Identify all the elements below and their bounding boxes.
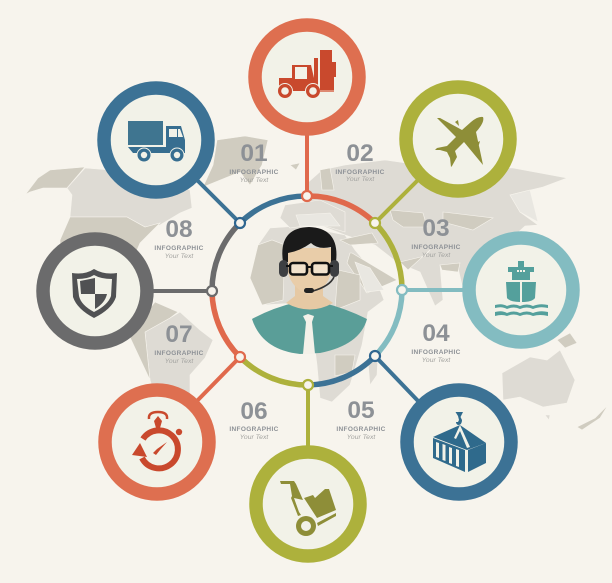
label 07 — [154, 321, 204, 365]
step circle 6: stopwatch — [105, 390, 209, 494]
world map — [2, 136, 608, 430]
central ring — [212, 196, 402, 385]
label 02: INFOGRAPHIC — [335, 169, 385, 176]
step circle 4: container — [407, 390, 511, 494]
label 03: Your Text — [422, 252, 451, 259]
label 02: 02 — [346, 140, 374, 167]
icon: ship — [495, 261, 548, 316]
step circle 7: shield — [43, 239, 147, 343]
label 06 — [229, 398, 279, 441]
label 01: 01 — [240, 140, 268, 167]
icon: shield — [72, 269, 117, 318]
step circle 2: airplane — [406, 87, 510, 191]
label 07: Your Text — [165, 358, 194, 365]
label 04 — [411, 320, 461, 364]
icon: truck — [128, 121, 185, 162]
label 07: INFOGRAPHIC — [154, 350, 204, 357]
connector lines — [150, 130, 465, 450]
label 07: 07 — [165, 321, 193, 348]
label 06: Your Text — [240, 434, 269, 441]
label 08: INFOGRAPHIC — [154, 245, 204, 252]
label 05 — [336, 397, 386, 441]
label 03: 03 — [422, 215, 450, 242]
icon: airplane — [435, 117, 483, 167]
label 03: INFOGRAPHIC — [411, 244, 461, 251]
label 05: 05 — [347, 397, 375, 424]
label 06: 06 — [240, 398, 268, 425]
label 08: Your Text — [165, 253, 194, 260]
label 01: Your Text — [240, 177, 269, 184]
label 04: Your Text — [422, 357, 451, 364]
step circle 1: forklift — [255, 25, 359, 129]
ring nodes — [207, 191, 407, 390]
label 08: 08 — [165, 216, 193, 243]
label 02 — [335, 140, 385, 183]
label 03 — [411, 215, 461, 259]
label 08 — [154, 216, 204, 260]
step circle 3: ship — [469, 238, 573, 342]
agent with headset — [252, 227, 367, 354]
icon: hand truck — [280, 481, 336, 536]
label 01 — [229, 140, 279, 184]
icon: stopwatch — [132, 412, 182, 468]
label 06: INFOGRAPHIC — [229, 426, 279, 433]
label 02: Your Text — [346, 176, 375, 183]
label 05: Your Text — [347, 434, 376, 441]
label 04: INFOGRAPHIC — [411, 349, 461, 356]
label 04: 04 — [422, 320, 450, 347]
step circle 5: hand truck — [256, 452, 360, 556]
icon: forklift — [278, 50, 336, 98]
label 01: INFOGRAPHIC — [229, 169, 279, 176]
icon: cargo container — [433, 412, 486, 472]
label 05: INFOGRAPHIC — [336, 426, 386, 433]
step circle 8: truck — [104, 88, 208, 192]
